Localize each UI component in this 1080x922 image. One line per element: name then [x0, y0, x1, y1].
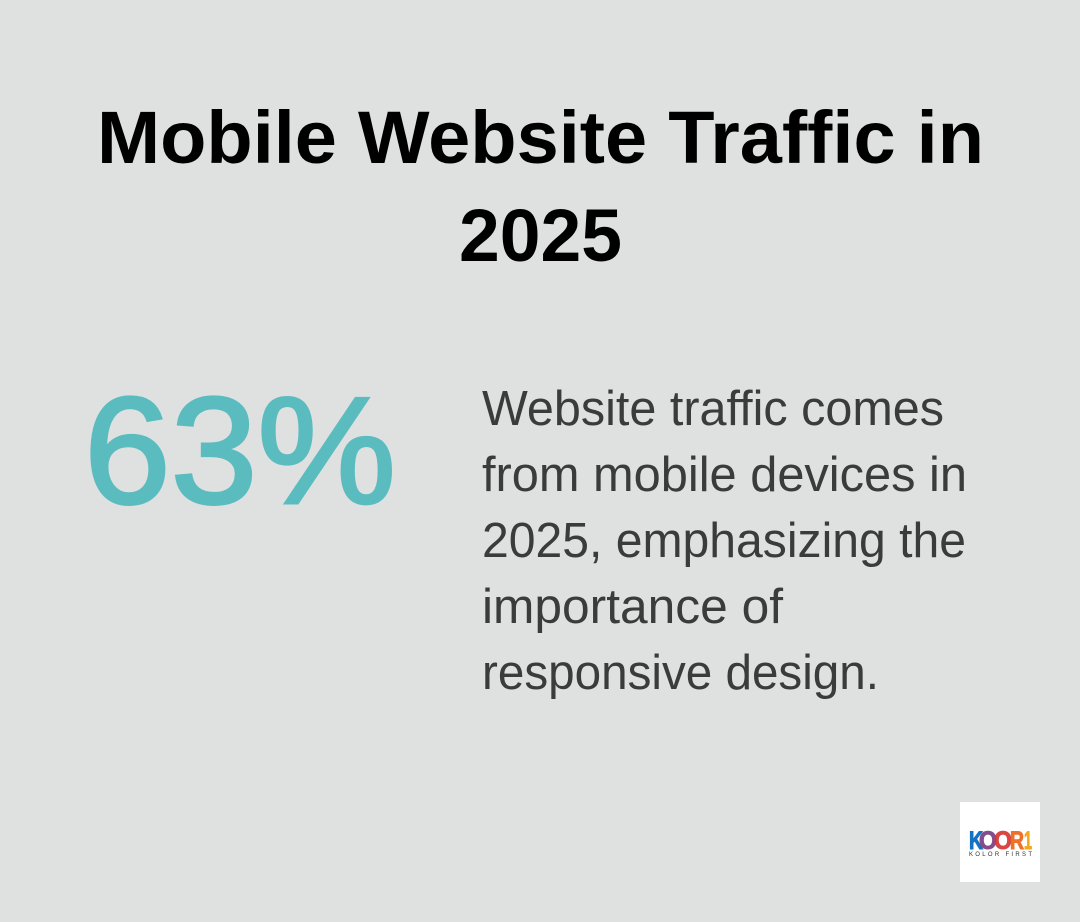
logo: Koor1 Kolor First: KOLOR FIRST	[969, 852, 1032, 858]
logo: Koor1 Kolor First: K	[969, 827, 983, 855]
logo: Koor1 Kolor First: O	[994, 827, 1012, 855]
logo: Koor1 Kolor First: 1	[1024, 827, 1032, 855]
logo: Koor1 Kolor First	[960, 802, 1040, 882]
description text: responsive design.	[482, 646, 879, 700]
big statistic: 63%: 63%	[84, 366, 396, 536]
logo: Koor1 Kolor First: R	[1010, 827, 1024, 855]
description text: from mobile devices in	[482, 448, 967, 502]
title: Mobile Website Traffic in	[97, 96, 984, 179]
logo: Koor1 Kolor First: O	[979, 827, 997, 855]
description text: 2025, emphasizing the	[482, 514, 966, 568]
description text	[482, 382, 967, 700]
description text: importance of	[482, 580, 783, 634]
title	[97, 96, 984, 277]
description text: Website traffic comes	[482, 382, 944, 436]
title: 2025	[459, 194, 622, 277]
